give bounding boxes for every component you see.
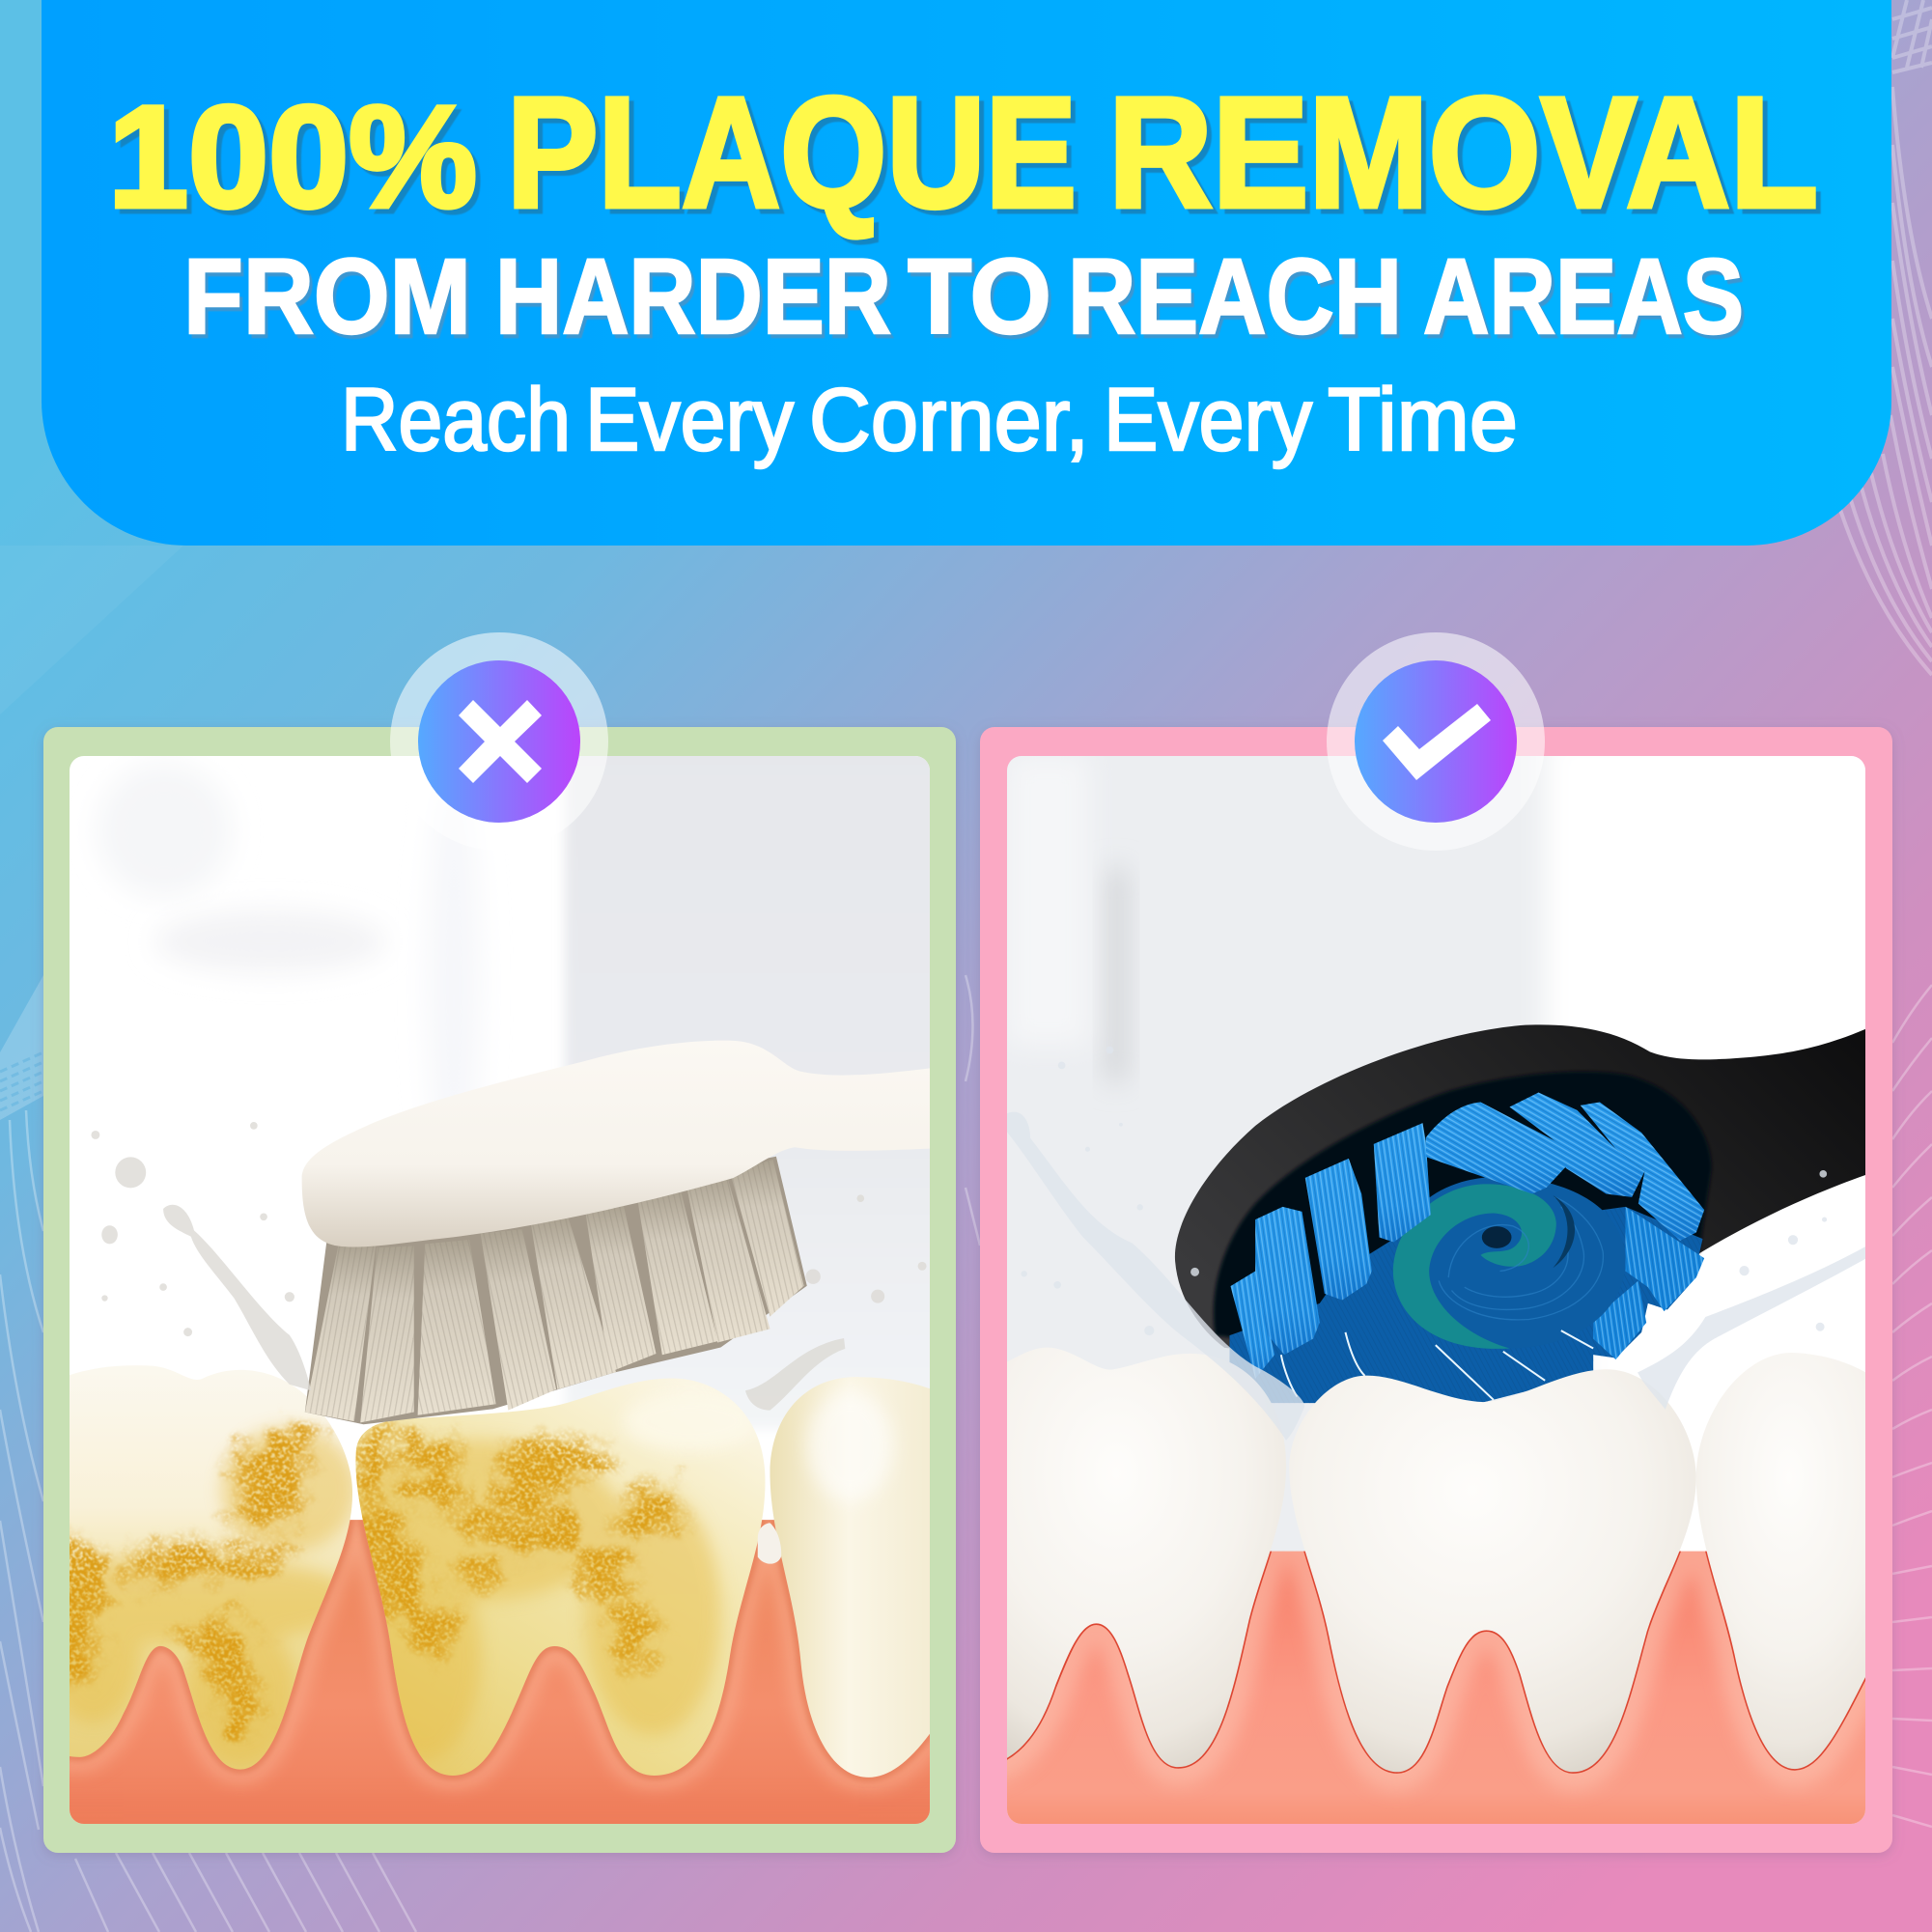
photo: plaque-covered teeth <box>70 756 930 1824</box>
subtitle: from harder to reach areas: REACH <box>1068 238 1402 356</box>
tooth: right, clean <box>1696 1353 1865 1769</box>
subtitle: from harder to reach areas <box>183 238 1744 356</box>
panel: electric brush clean teeth <box>978 727 1903 1853</box>
tagline: Reach <box>341 371 571 469</box>
bristle swirl <box>1393 1177 1625 1349</box>
tagline: Every <box>585 371 794 469</box>
title line: 100% plaque removal: PLAQUE <box>507 64 1077 240</box>
gums <box>1007 1551 1865 1824</box>
tagline: Every <box>1104 371 1312 469</box>
water splash and droplets <box>1007 1047 1866 1441</box>
title line: 100% plaque removal: REMOVAL <box>1108 64 1818 240</box>
tooth: left, stained <box>70 1365 352 1770</box>
subtitle: from harder to reach areas: TO <box>908 238 1051 356</box>
tooth: left, clean <box>978 1348 1286 1767</box>
tooth: centre, clean <box>1289 1369 1696 1772</box>
tooth: right, cream <box>770 1377 930 1778</box>
header banner <box>42 0 1891 546</box>
icon: cross badge <box>390 632 608 851</box>
subtitle: from harder to reach areas: FROM <box>183 238 471 356</box>
brush head and handle <box>302 1041 961 1247</box>
tagline: Time <box>1328 371 1518 469</box>
tagline: Corner, <box>809 371 1089 469</box>
title line: 100% plaque removal <box>108 64 1818 240</box>
brush bristles <box>305 1157 807 1424</box>
panel: manual brush with plaque <box>13 727 973 1853</box>
blue bristles <box>1229 1092 1704 1403</box>
subtitle: from harder to reach areas: AREAS <box>1423 238 1744 356</box>
water splash and droplets <box>91 1122 927 1411</box>
photo: clean white teeth <box>978 734 1903 1834</box>
icon: check badge <box>1327 632 1545 851</box>
tooth: centre, stained <box>339 1378 765 1776</box>
bristle cavity <box>1214 1072 1712 1366</box>
gums <box>70 1520 930 1824</box>
title line: 100% plaque removal: 100% <box>108 75 477 238</box>
tagline <box>341 371 1518 469</box>
subtitle: from harder to reach areas: HARDER <box>495 238 891 356</box>
black brush head and handle <box>1174 1024 1865 1348</box>
